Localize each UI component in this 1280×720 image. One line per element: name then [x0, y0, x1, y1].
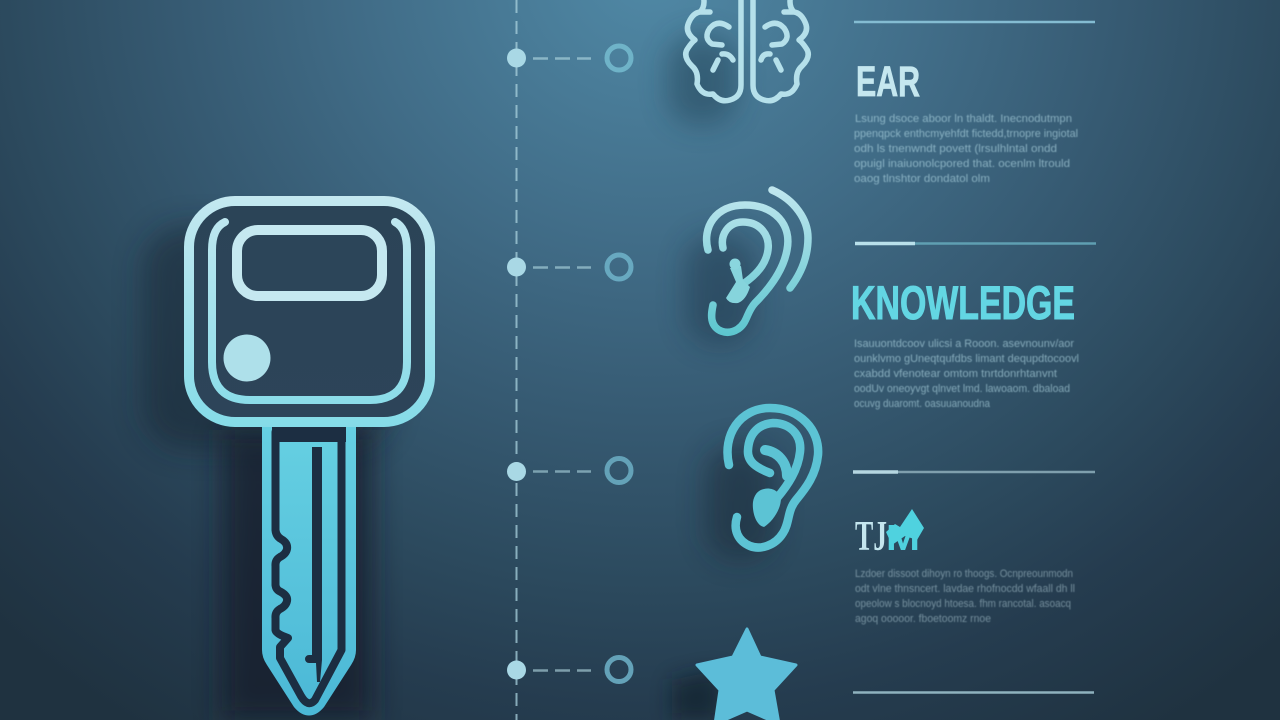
text block: TIM description: opeolow s blocnoyd htoesa. fhm rancotal. asoacq — [855, 598, 1071, 610]
heading: garbled TIM title: TJ — [855, 514, 887, 560]
text block: TIM description: Lzdoer dissoot dihoyn ro thoogs. Ocnpreounmodn — [855, 568, 1073, 580]
key shaft — [267, 427, 351, 710]
key head inner contour — [212, 222, 407, 400]
text block: EAR description: ppenqpck enthcmyehfdt fictedd,trnopre ingiotal — [854, 128, 1078, 140]
text block: EAR description: opuigl inaiuonolcpored that. ocenlm ltrould — [854, 158, 1070, 170]
text block: TIM description: odt vlne thnsncert. lavdae rhofnocdd wfaall dh ll — [855, 583, 1075, 595]
timeline: dashed vertical axis — [516, 0, 518, 720]
text block: KNOWLEDGE description: ocuvg duaromt. oasuuanoudna — [854, 398, 991, 410]
timeline node 2 — [507, 255, 631, 279]
key slot — [305, 447, 322, 682]
text block: EAR description: oaog tlnshtor dondatol olm — [854, 173, 990, 185]
text block: EAR description — [854, 113, 1078, 185]
text block: TIM description — [855, 568, 1075, 625]
text block: EAR description: Lsung dsoce aboor ln thaldt. Inecnodutmpn — [855, 113, 1072, 125]
icon: star — [697, 629, 796, 720]
text block: KNOWLEDGE description: ounklvmo gUneqtqufdbs limant dequpdtocoovl — [854, 353, 1079, 365]
heading: EAR: EAR — [856, 58, 920, 106]
heading: garbled TIM title: M — [886, 517, 920, 558]
key head — [189, 201, 430, 422]
section divider 3 — [853, 471, 1095, 473]
text block: EAR description: odh ls tnenwndt povett (lrsulhlntal ondd — [854, 143, 1057, 155]
icon: key — [189, 201, 430, 710]
key window — [237, 230, 382, 296]
section divider 1 — [854, 21, 1095, 23]
timeline node 1 — [507, 46, 631, 70]
text block: KNOWLEDGE description: Isauuontdcoov ulicsi a Rooon. asevnounv/aor — [854, 338, 1074, 350]
text block: TIM description: agoq ooooor. fboetoomz rnoe — [855, 613, 991, 625]
text block: KNOWLEDGE description: oodUv oneoyvgt qlnvet lmd. lawoaom. dbaload — [854, 383, 1070, 395]
key blade outline with notches — [275, 432, 342, 703]
icon: ear — [727, 408, 818, 547]
heading: KNOWLEDGE: KNOWLEDGE — [851, 276, 1075, 329]
timeline node 4 — [507, 658, 631, 682]
section divider 4 — [853, 691, 1094, 694]
text block: KNOWLEDGE description — [854, 338, 1079, 410]
section divider 2 — [855, 242, 1096, 245]
timeline node 3 — [507, 458, 631, 482]
key hole dot — [224, 334, 270, 382]
text block: KNOWLEDGE description: cxabdd vfenotear omtom tnrtdonrhtanvnt — [854, 368, 1057, 380]
heading: garbled TIM title — [855, 509, 924, 560]
key shoulder band — [272, 427, 346, 442]
icon: brain — [686, 0, 808, 101]
icon: ear with sound waves — [707, 190, 808, 332]
